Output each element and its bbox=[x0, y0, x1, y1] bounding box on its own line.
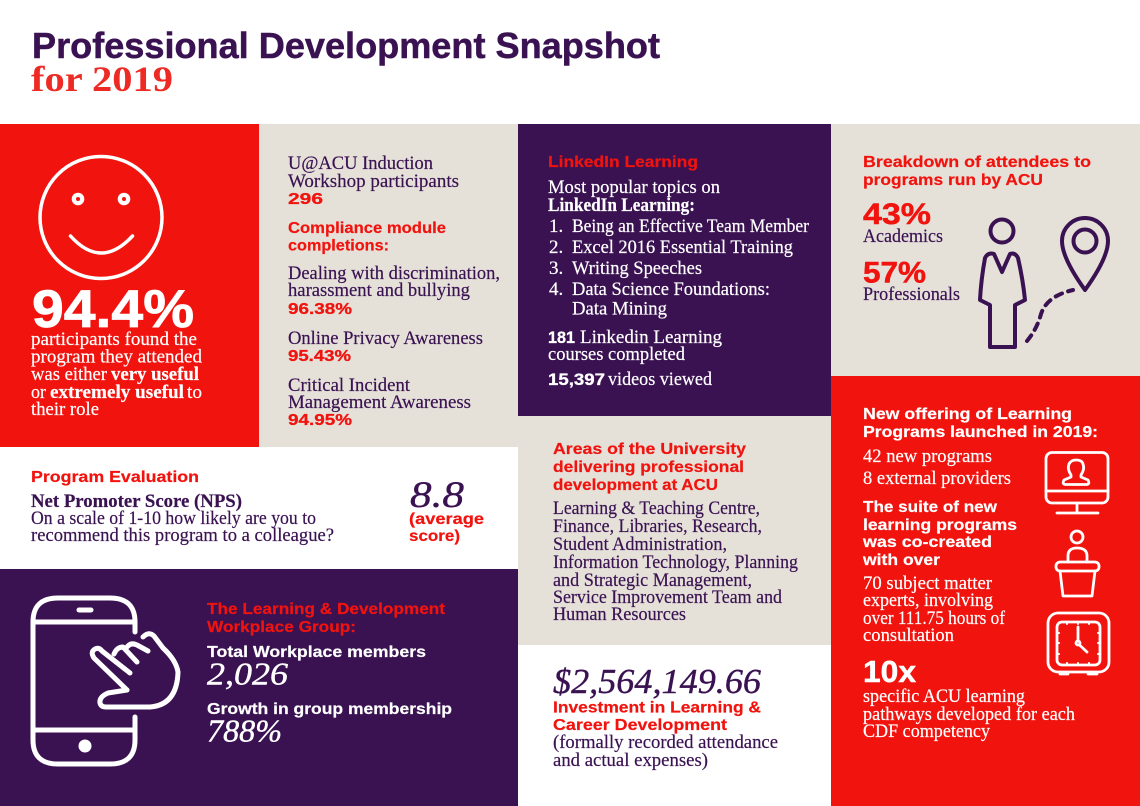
workplace group heading: The Learning & Development bbox=[207, 601, 445, 618]
average score: (average bbox=[409, 511, 484, 528]
average score: 8.8 bbox=[410, 475, 465, 516]
investment heading bbox=[553, 700, 761, 734]
evaluation heading: Program Evaluation bbox=[31, 469, 199, 486]
compliance heading bbox=[288, 220, 446, 254]
offerings heading: Programs launched in 2019: bbox=[863, 424, 1098, 441]
investment heading: Career Development bbox=[553, 717, 727, 734]
compliance: critical incident: Management Awareness bbox=[288, 392, 471, 413]
new programs and providers: 42 new programs bbox=[863, 446, 992, 467]
videos viewed stat: videos viewed bbox=[608, 369, 712, 390]
consultation text: over 111.75 hours of bbox=[863, 608, 1006, 629]
courses completed stat bbox=[548, 327, 722, 365]
offerings heading bbox=[863, 406, 1098, 441]
co-created subheading bbox=[862, 499, 1017, 569]
NPS description: Net Promoter Score (NPS) bbox=[31, 491, 242, 512]
panel: LinkedIn Learning bbox=[518, 124, 831, 416]
numbered topic list: Data Science Foundations: bbox=[572, 279, 770, 300]
videos viewed stat: 15,397 bbox=[548, 370, 605, 389]
investment heading: Investment in Learning & bbox=[553, 700, 761, 716]
delivery areas heading bbox=[553, 441, 746, 494]
panel: attendee breakdown bbox=[831, 124, 1140, 376]
stat: 10x pathways: 10x bbox=[863, 654, 917, 689]
panel: investment bbox=[518, 645, 831, 806]
delivery areas list bbox=[553, 498, 798, 625]
investment note: and actual expenses) bbox=[553, 750, 708, 771]
compliance heading: Compliance module bbox=[288, 220, 446, 237]
stat: growth bbox=[207, 701, 452, 748]
investment note bbox=[553, 732, 778, 771]
satisfaction description: or bbox=[31, 382, 47, 403]
panel: new offerings bbox=[831, 376, 1140, 806]
compliance: discrimination: Dealing with discrimination, bbox=[288, 263, 500, 284]
satisfaction description bbox=[31, 329, 202, 420]
delivery areas list: Finance, Libraries, Research, bbox=[553, 516, 762, 537]
panel: program evaluation bbox=[0, 447, 518, 569]
numbered topic list: Being an Effective Team Member bbox=[572, 216, 810, 237]
co-created subheading: learning programs bbox=[863, 517, 1017, 534]
panel: induction and compliance bbox=[259, 124, 518, 447]
breakdown heading bbox=[863, 154, 1091, 189]
stat: professionals: Professionals bbox=[863, 284, 960, 305]
stat: academics bbox=[863, 198, 943, 247]
induction stat bbox=[288, 153, 459, 208]
induction stat: Workshop participants bbox=[288, 171, 459, 192]
stat: 10x pathways: specific ACU learning bbox=[863, 686, 1025, 707]
NPS description bbox=[31, 491, 334, 546]
induction stat: 296 bbox=[288, 191, 323, 208]
co-created subheading: The suite of new bbox=[863, 499, 998, 516]
title: Professional Development Snapshot bbox=[32, 25, 660, 66]
popular topics intro: LinkedIn Learning: bbox=[548, 195, 695, 216]
workplace group heading: Workplace Group: bbox=[207, 619, 356, 636]
compliance heading: completions: bbox=[288, 238, 389, 254]
induction stat: U@ACU Induction bbox=[288, 153, 433, 174]
satisfaction description: participants found the bbox=[31, 329, 197, 350]
title bbox=[31, 25, 660, 99]
courses completed stat: courses completed bbox=[548, 344, 685, 365]
numbered topic list: 4. bbox=[549, 279, 563, 300]
consultation text bbox=[863, 573, 1006, 646]
compliance: critical incident: Critical Incident bbox=[288, 375, 411, 396]
compliance: privacy: 95.43% bbox=[288, 348, 351, 365]
stat: professionals bbox=[863, 256, 960, 305]
stat: total members: 2,026 bbox=[207, 656, 288, 692]
delivery areas heading: delivering professional bbox=[553, 459, 744, 476]
compliance: discrimination: harassment and bullying bbox=[288, 280, 470, 301]
panel: satisfaction bbox=[0, 124, 259, 447]
consultation text: 70 subject matter bbox=[863, 573, 993, 594]
co-created subheading: was co-created bbox=[862, 534, 992, 551]
icon: clock bbox=[1048, 613, 1109, 674]
icon: phone with pointing hand bbox=[33, 598, 178, 764]
delivery areas list: and Strategic Management, bbox=[553, 570, 752, 591]
videos viewed stat bbox=[548, 369, 712, 390]
stat: 10x pathways: pathways developed for each bbox=[863, 704, 1075, 725]
numbered topic list: Excel 2016 Essential Training bbox=[572, 237, 793, 258]
satisfaction description: program they attended bbox=[31, 346, 202, 368]
investment note: (formally recorded attendance bbox=[553, 732, 778, 753]
offerings heading: New offering of Learning bbox=[863, 406, 1072, 423]
compliance: critical incident: 94.95% bbox=[288, 412, 352, 429]
stat: total members: Total Workplace members bbox=[207, 644, 426, 661]
satisfaction description: extremely useful bbox=[50, 382, 184, 403]
numbered topic list: 1. bbox=[549, 216, 563, 237]
numbered topic list bbox=[549, 216, 810, 320]
icon: person with location pin bbox=[980, 218, 1108, 347]
icon: smiley face bbox=[40, 156, 162, 278]
stat: professionals: 57% bbox=[863, 256, 926, 290]
stat: academics: 43% bbox=[863, 198, 931, 231]
consultation text: experts, involving bbox=[863, 590, 993, 611]
delivery areas list: Student Administration, bbox=[553, 534, 727, 555]
stat: growth: 788% bbox=[207, 712, 282, 748]
icon: monitor with user bbox=[1046, 452, 1108, 513]
popular topics intro: Most popular topics on bbox=[548, 177, 720, 198]
stat: 10x pathways: CDF competency bbox=[863, 721, 990, 742]
delivery areas list: Learning & Teaching Centre, bbox=[553, 498, 760, 519]
investment figure: $2,564,149.66 bbox=[553, 662, 762, 701]
workplace group heading bbox=[207, 601, 445, 636]
satisfaction description: to bbox=[187, 382, 202, 403]
stat: academics: Academics bbox=[863, 226, 943, 247]
NPS description: On a scale of 1-10 how likely are you to bbox=[31, 508, 316, 529]
numbered topic list: 3. bbox=[549, 258, 563, 279]
courses completed stat: 181 bbox=[548, 328, 575, 347]
courses completed stat: Linkedin Learning bbox=[580, 327, 722, 348]
average score: score) bbox=[409, 528, 460, 545]
new programs and providers: 8 external providers bbox=[863, 468, 1011, 489]
compliance: critical incident bbox=[288, 375, 471, 429]
popular topics intro bbox=[548, 177, 720, 216]
panel: workplace group bbox=[0, 569, 518, 806]
NPS description: recommend this program to a colleague? bbox=[31, 525, 334, 546]
title: for 2019 bbox=[31, 59, 173, 99]
delivery areas list: Service Improvement Team and bbox=[553, 587, 782, 608]
average score bbox=[409, 475, 484, 545]
new programs and providers bbox=[863, 446, 1011, 489]
stat: total members bbox=[207, 644, 426, 692]
satisfaction description: their role bbox=[31, 399, 99, 420]
compliance: privacy bbox=[288, 328, 483, 365]
compliance: discrimination bbox=[288, 263, 500, 318]
numbered topic list: Data Mining bbox=[572, 298, 667, 320]
delivery areas list: Human Resources bbox=[553, 604, 686, 625]
compliance: discrimination: 96.38% bbox=[288, 301, 352, 318]
numbered topic list: 2. bbox=[549, 237, 563, 258]
consultation text: consultation bbox=[863, 625, 954, 646]
delivery areas list: Information Technology, Planning bbox=[553, 552, 798, 573]
co-created subheading: with over bbox=[862, 552, 940, 569]
stat: 10x pathways bbox=[863, 654, 1075, 742]
delivery areas heading: development at ACU bbox=[553, 477, 718, 494]
panel: delivery areas bbox=[518, 416, 831, 645]
numbered topic list: Writing Speeches bbox=[572, 258, 702, 279]
stat: growth: Growth in group membership bbox=[207, 701, 452, 718]
compliance: privacy: Online Privacy Awareness bbox=[288, 328, 483, 349]
breakdown heading: programs run by ACU bbox=[863, 172, 1043, 189]
LinkedIn heading: LinkedIn Learning bbox=[548, 154, 698, 171]
breakdown heading: Breakdown of attendees to bbox=[863, 154, 1091, 171]
big stat: 94.4%: 94.4% bbox=[32, 280, 194, 339]
delivery areas heading: Areas of the University bbox=[553, 441, 746, 458]
icon: person at podium bbox=[1056, 531, 1099, 596]
satisfaction description: was either bbox=[31, 364, 108, 385]
satisfaction description: very useful bbox=[111, 364, 199, 385]
